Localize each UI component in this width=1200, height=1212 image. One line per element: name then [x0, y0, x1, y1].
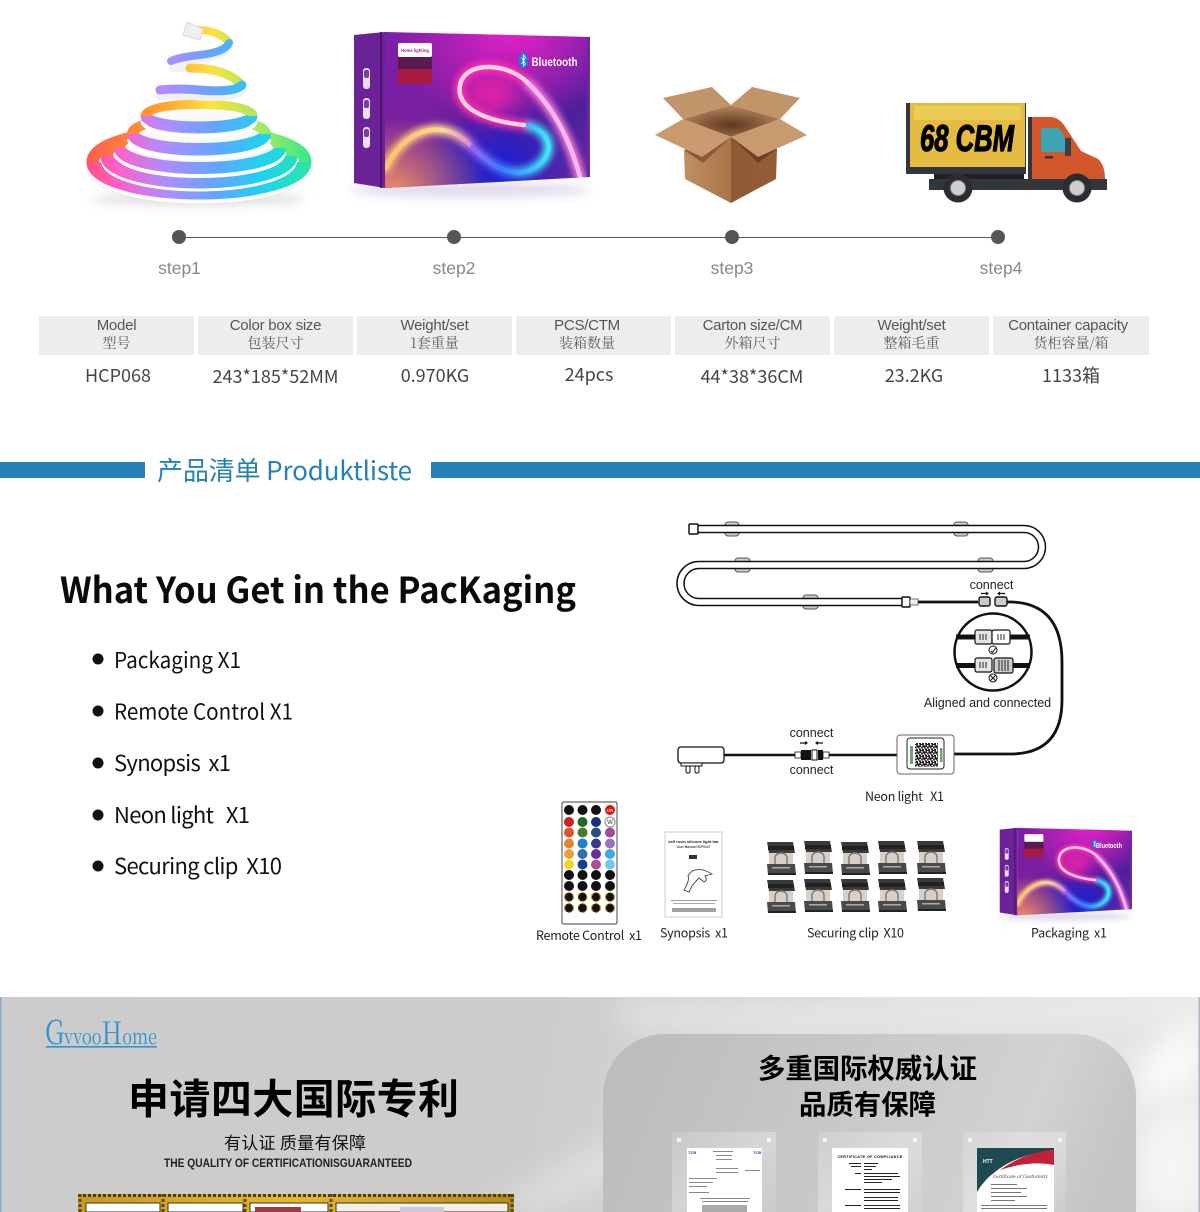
section header: product list: 产品清单 Produktliste [157, 451, 412, 488]
label: aligned and connected: Aligned and connected [924, 696, 1051, 710]
list: package contents: Remote Control X1 [114, 694, 293, 726]
certification section [0, 997, 1200, 1212]
table: product specifications: 1133箱 [1042, 362, 1100, 388]
label: connect: connect [970, 578, 1014, 592]
synopsis leaflet: User Manual HCP0147 [677, 845, 711, 849]
patent certificates in gold frames [78, 1194, 514, 1212]
strip mounting clips [725, 522, 993, 609]
panel: international certification [603, 1034, 1136, 1212]
coil upper loop [160, 68, 242, 96]
remote control: ON [607, 808, 613, 813]
table: product specifications: Model [97, 317, 136, 334]
coil ring 4 [133, 119, 265, 155]
table: product specifications: Weight/set [400, 317, 470, 334]
heading: what you get: What You Get in the PacKaging [60, 562, 576, 614]
subtitle: certified quality: 有认证 质量有保障 [224, 1129, 366, 1154]
remote control: W [607, 820, 613, 826]
table: product specifications: 1套重量 [410, 333, 459, 353]
label: remote control: Remote Control x1 [536, 925, 642, 944]
table: product specifications: 24pcs [565, 361, 613, 387]
neon strip [680, 529, 1042, 602]
list: package contents: Synopsis x1 [114, 746, 231, 778]
securing clips [767, 841, 946, 913]
table: product specifications: Color box size [230, 317, 321, 334]
packaging box thumbnail: Bluetooth [1096, 843, 1122, 850]
list: package contents: Neon light X1 [114, 798, 250, 830]
label: packaging: Packaging x1 [1031, 922, 1107, 942]
synopsis leaflet: self neon silicone light bar [668, 839, 719, 844]
label: connect lower: connect [790, 763, 834, 777]
section header: product list [0, 451, 1200, 488]
synopsis leaflet [665, 832, 722, 917]
subtitle: english: THE QUALITY OF CERTIFICATIONISGUARANTEED [164, 1158, 412, 1170]
box Bluetooth label: Bluetooth [532, 55, 578, 69]
coil ring 2 [107, 130, 291, 185]
coil ring 5 [146, 105, 252, 133]
table: product specifications: 包装尺寸 [248, 333, 304, 353]
list: package contents: Packaging X1 [114, 643, 241, 675]
coil top loop [171, 22, 229, 65]
certificate one: TCB [688, 1150, 696, 1155]
table: product specifications [39, 316, 1149, 389]
table: product specifications: Container capacity [1008, 317, 1129, 334]
table: product specifications: 243*185*52MM [213, 363, 338, 389]
box model label: Home lighting [401, 48, 429, 53]
timeline: four steps [158, 230, 1023, 278]
label: neon light: Neon light X1 [865, 786, 944, 805]
certificate three: HTT [983, 1159, 993, 1165]
power wire [918, 602, 1062, 754]
certificate one: TCB [753, 1150, 761, 1155]
certificate three: Certificate of Conformity [993, 1174, 1049, 1180]
certificate two: CERTIFICATE OF COMPLIANCE [837, 1155, 903, 1159]
list: package contents: Securing clip X10 [114, 849, 282, 881]
table: product specifications: 整箱毛重 [884, 333, 940, 353]
label: securing clip: Securing clip X10 [807, 922, 904, 942]
table: product specifications: Weight/set [877, 317, 947, 334]
icon: open cardboard carton [655, 87, 807, 203]
panel heading line 1: 多重国际权威认证 [758, 1046, 977, 1086]
timeline: four steps: step2 [433, 258, 475, 278]
inset: connector alignment detail [954, 614, 1032, 690]
table: product specifications: 装箱数量 [559, 333, 615, 353]
list: package contents [92, 643, 293, 881]
label: connect upper: connect [790, 726, 834, 740]
diagram: neon light wiring [678, 522, 1062, 805]
lower inline connector [795, 741, 829, 760]
top connector pair [979, 597, 1007, 606]
coil ring 3 [120, 128, 280, 172]
table: product specifications: 0.970KG [401, 362, 469, 388]
truck label: 68 CBM [920, 118, 1015, 159]
power adapter [678, 747, 724, 773]
certificate three [963, 1132, 1066, 1212]
table: product specifications: 型号 [102, 333, 130, 353]
certificate one [672, 1132, 776, 1212]
title: patents: 申请四大国际专利 [128, 1066, 459, 1126]
table: product specifications: Carton size/CM [703, 317, 802, 334]
coil ring 1 [94, 132, 304, 197]
product: retail box [350, 32, 590, 197]
table: product specifications: 23.2KG [885, 362, 943, 388]
controller with QR code [897, 735, 954, 774]
timeline: four steps: step3 [711, 258, 753, 278]
remote control [562, 802, 617, 924]
certificate two [818, 1132, 922, 1212]
timeline: four steps: step4 [980, 258, 1023, 278]
logo: GvvooHome: GvvooHome [45, 1007, 157, 1054]
timeline: four steps: step1 [158, 258, 201, 278]
table: product specifications: 外箱尺寸 [724, 333, 780, 353]
product: neon light coil [91, 22, 307, 205]
label: synopsis: Synopsis x1 [660, 922, 728, 942]
table: product specifications: 货柜容量/箱 [1034, 333, 1108, 353]
packaging box thumbnail [998, 828, 1132, 920]
icon: delivery truck [906, 103, 1107, 202]
table: product specifications: PCS/CTM [554, 317, 620, 334]
panel heading line 2: 品质有保障 [799, 1082, 936, 1122]
table: product specifications: HCP068 [85, 362, 151, 388]
logo: GvvooHome [46, 1020, 157, 1048]
table: product specifications: 44*38*36CM [701, 363, 803, 389]
